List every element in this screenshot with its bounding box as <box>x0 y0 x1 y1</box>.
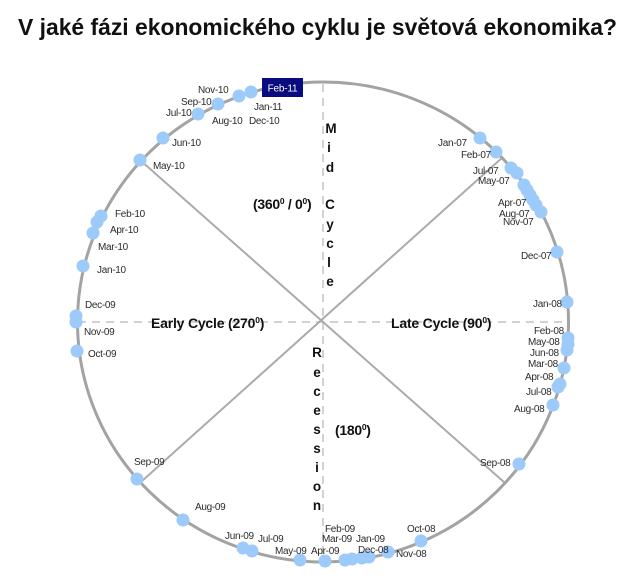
label: Recession: e <box>313 403 321 418</box>
date labels: Jan-08 <box>533 299 563 310</box>
date labels: Aug-07 <box>499 209 530 220</box>
label: 360/0 degrees: / 0 <box>284 196 303 212</box>
label: Early Cycle: Early Cycle (270 <box>151 315 255 331</box>
label: 180 degrees: 0 <box>362 422 367 432</box>
label: Early Cycle: 0 <box>255 315 260 325</box>
date labels: Dec-09 <box>85 300 116 311</box>
label: Recession: s <box>313 422 321 437</box>
label: Recession <box>312 345 322 513</box>
label: Recession: e <box>313 365 321 380</box>
date labels: Jul-08 <box>526 387 552 398</box>
label: Mid Cycle: l <box>327 255 331 270</box>
date labels <box>84 85 565 560</box>
date labels: Oct-08 <box>407 524 436 535</box>
label: Recession: s <box>313 441 321 456</box>
date labels: Nov-09 <box>84 327 115 338</box>
label: 360/0 degrees: 0 <box>303 196 308 206</box>
label: Early Cycle: ) <box>260 315 264 331</box>
date labels: May-10 <box>153 161 185 172</box>
date labels: Jun-09 <box>225 531 255 542</box>
date labels: Jun-08 <box>530 348 560 359</box>
label: 180 degrees: (180 <box>335 422 362 438</box>
date labels: Feb-08 <box>534 326 565 337</box>
date labels: Nov-10 <box>198 85 229 96</box>
date labels: May-09 <box>275 546 307 557</box>
date labels: Apr-09 <box>311 546 340 557</box>
date labels: Feb-07 <box>461 150 492 161</box>
data points <box>70 86 574 568</box>
phase boundary spokes <box>140 157 505 483</box>
label: 360/0 degrees: 0 <box>280 196 285 206</box>
date labels: Sep-08 <box>480 458 511 469</box>
date labels: Jan-11 <box>254 102 283 113</box>
date labels: Mar-09 <box>322 534 353 545</box>
date labels: Dec-10 <box>249 116 280 127</box>
date labels: Jan-07 <box>438 138 468 149</box>
chart: economic cycle circle <box>70 78 574 568</box>
label: Mid Cycle: i <box>327 140 331 155</box>
label: Recession: n <box>313 498 321 513</box>
dashed axes <box>78 84 568 562</box>
cycle ring <box>78 82 568 562</box>
label: 360/0 degrees: (360 <box>253 196 280 212</box>
date labels: Nov-08 <box>396 549 427 560</box>
date labels: Aug-08 <box>514 404 545 415</box>
date labels: Aug-09 <box>195 502 226 513</box>
label: Mid Cycle: e <box>326 274 334 289</box>
label: Late Cycle: Late Cycle (90 <box>391 315 482 331</box>
label: Recession: i <box>315 460 319 475</box>
date labels: Mar-10 <box>98 242 129 253</box>
date labels: May-07 <box>478 176 510 187</box>
label: Recession: o <box>313 479 321 494</box>
date labels: Feb-09 <box>325 524 356 535</box>
label: Mid Cycle <box>325 121 337 289</box>
date labels: Mar-08 <box>528 359 559 370</box>
date labels: Dec-08 <box>358 545 389 556</box>
current month highlight: Feb-11: Feb-11 <box>268 84 298 94</box>
date labels: Jan-09 <box>356 534 386 545</box>
date labels: Nov-07 <box>503 217 534 228</box>
date labels: Dec-07 <box>521 251 552 262</box>
date labels: Jun-10 <box>172 138 202 149</box>
label: Mid Cycle: C <box>325 197 335 212</box>
label: Mid Cycle: y <box>326 217 334 232</box>
date labels: May-08 <box>528 337 560 348</box>
date labels: Apr-08 <box>525 372 554 383</box>
date labels: Feb-10 <box>115 209 146 220</box>
date labels: Sep-10 <box>181 97 212 108</box>
date labels: Jul-10 <box>166 108 192 119</box>
label: Late Cycle: 0 <box>482 315 487 325</box>
label: 360/0 degrees: ) <box>307 196 311 212</box>
date labels: Jul-09 <box>258 534 284 545</box>
date labels: Jan-10 <box>97 265 127 276</box>
label: Mid Cycle: M <box>325 121 337 136</box>
date labels: Apr-07 <box>498 198 527 209</box>
date labels: Apr-10 <box>110 225 139 236</box>
current month highlight: Feb-11 <box>262 78 303 97</box>
date labels: Jul-07 <box>473 166 499 177</box>
label: Recession: R <box>312 345 322 360</box>
label: Mid Cycle: d <box>326 160 334 175</box>
date labels: Aug-10 <box>212 116 243 127</box>
label: Recession: c <box>313 384 321 399</box>
label: 180 degrees: ) <box>366 422 371 438</box>
date labels: Oct-09 <box>88 349 117 360</box>
date labels: Sep-09 <box>134 457 165 468</box>
label: Mid Cycle: c <box>326 236 334 251</box>
title: V jaké fázi ekonomického cyklu je světová ekonomika? <box>18 14 617 40</box>
label: Late Cycle: ) <box>487 315 491 331</box>
